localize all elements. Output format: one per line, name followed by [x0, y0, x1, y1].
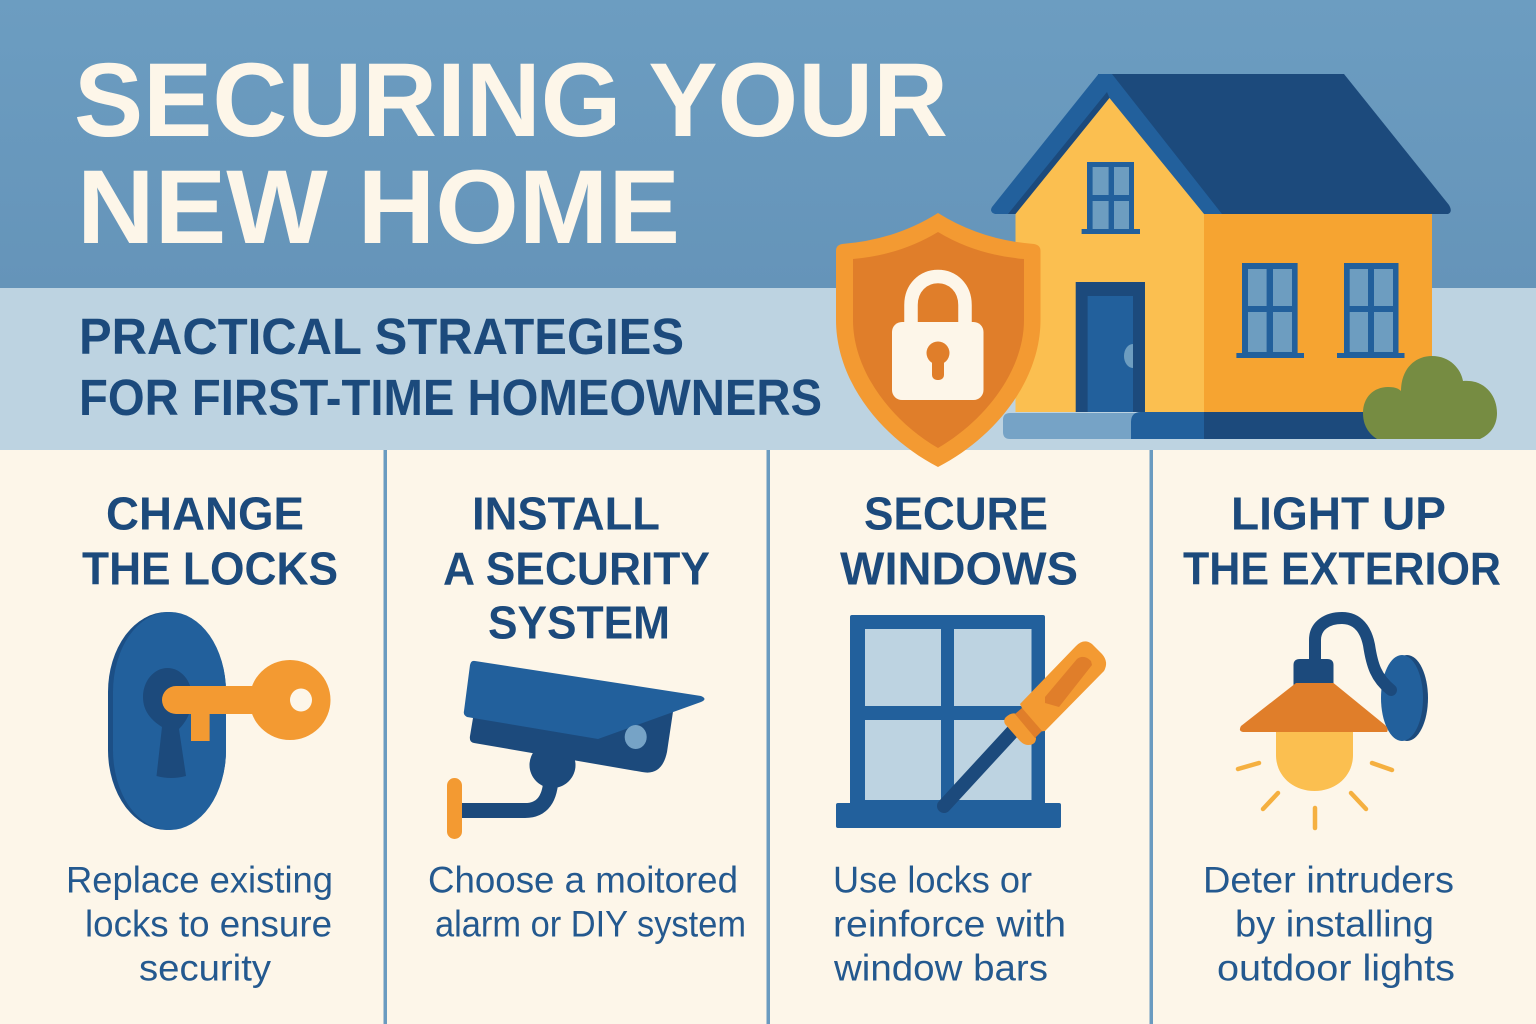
cards background: [0, 450, 1536, 1024]
heading: install a security system: INSTALL: [472, 488, 660, 540]
heading: secure windows: [840, 488, 1078, 594]
icon: security camera: [447, 661, 704, 839]
icon: key in lock: [108, 612, 330, 830]
heading: change the locks: CHANGE: [106, 488, 304, 540]
icon: shield with padlock: [836, 213, 1040, 467]
title: NEW HOME: [77, 149, 680, 266]
heading: light up the exterior: THE EXTERIOR: [1183, 542, 1501, 594]
description: change the locks: security: [139, 948, 272, 988]
heading: light up the exterior: [1183, 488, 1501, 594]
upper window: [1082, 162, 1140, 234]
heading: install a security system: SYSTEM: [488, 596, 670, 648]
description: change the locks: locks to ensure: [85, 904, 332, 944]
header background band: [0, 0, 1536, 288]
panel: secure windows: [833, 488, 1106, 988]
description: light up the exterior: [1203, 860, 1455, 988]
front steps: [1003, 412, 1379, 439]
panel: change the locks: [66, 488, 338, 988]
subtitle: FOR FIRST-TIME HOMEOWNERS: [79, 369, 822, 426]
description: light up the exterior: by installing: [1235, 904, 1434, 944]
description: install a security system: alarm or DIY system: [435, 904, 746, 944]
heading: secure windows: WINDOWS: [840, 542, 1078, 594]
heading: install a security system: [443, 488, 710, 648]
title: [74, 42, 948, 266]
description: light up the exterior: outdoor lights: [1217, 948, 1455, 988]
panel: light up the exterior: [1183, 488, 1501, 988]
heading: change the locks: [82, 488, 338, 594]
heading: install a security system: A SECURITY: [443, 542, 710, 594]
bush: [1363, 356, 1497, 439]
description: install a security system: [428, 860, 746, 944]
subtitle: [79, 308, 822, 426]
icon: house: [991, 74, 1497, 439]
description: light up the exterior: Deter intruders: [1203, 860, 1454, 900]
heading: light up the exterior: LIGHT UP: [1231, 488, 1446, 540]
door: [1076, 282, 1145, 412]
subtitle background band: [0, 288, 1536, 450]
description: change the locks: [66, 860, 333, 988]
heading: change the locks: THE LOCKS: [82, 542, 338, 594]
description: secure windows: window bars: [833, 948, 1048, 988]
left lower window: [1236, 263, 1304, 358]
description: change the locks: Replace existing: [66, 860, 333, 900]
panel: install a security system: [428, 488, 746, 944]
description: secure windows: Use locks or: [833, 860, 1032, 900]
icon: window with screwdriver: [836, 615, 1106, 828]
heading: secure windows: SECURE: [864, 488, 1048, 540]
description: secure windows: [833, 860, 1066, 988]
title: SECURING YOUR: [74, 42, 948, 159]
icon: wall lamp: [1238, 618, 1428, 828]
description: secure windows: reinforce with: [833, 904, 1066, 944]
description: install a security system: Choose a moitored: [428, 860, 738, 900]
right lower window: [1337, 263, 1404, 358]
subtitle: PRACTICAL STRATEGIES: [79, 308, 684, 365]
